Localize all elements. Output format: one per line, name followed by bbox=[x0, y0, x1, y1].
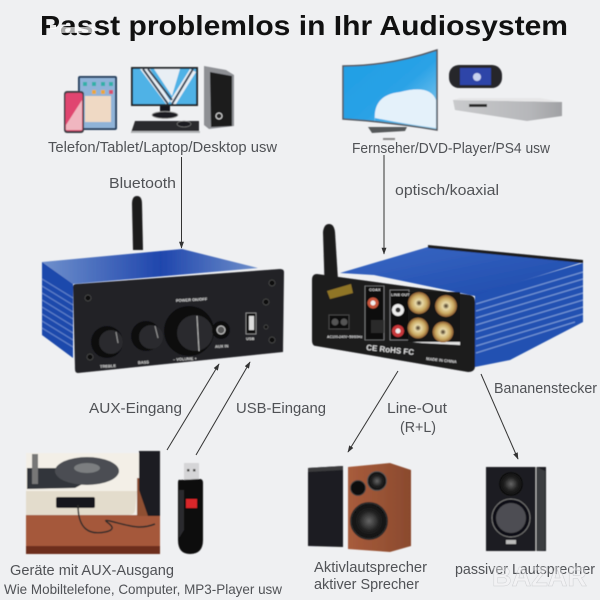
line out RCA bbox=[390, 290, 409, 340]
rear certifications: AC100-240V~50/60Hz bbox=[327, 335, 363, 339]
ribbed side bbox=[42, 262, 73, 358]
amplifier front view: AUX IN bbox=[215, 343, 229, 349]
front panel bbox=[73, 269, 284, 373]
handheld bbox=[449, 65, 502, 88]
amplifier rear view: CE RoHS FC bbox=[366, 343, 415, 357]
icon: active bookshelf speakers bbox=[308, 463, 411, 552]
curved TV bbox=[343, 50, 437, 130]
icon: phone, tablet, desktop computer bbox=[64, 66, 234, 133]
arrow: AUX cable bbox=[167, 364, 219, 450]
tablet bbox=[78, 76, 117, 130]
label: source devices left: Telefon/Tablet/Laptop/Desktop usw bbox=[48, 139, 277, 156]
amplifier front view bbox=[42, 196, 284, 373]
knobs bbox=[91, 326, 123, 358]
tonearm bbox=[32, 454, 38, 484]
amplifier front view: USB bbox=[246, 336, 255, 341]
title: Passt problemlos in Ihr Audiosystem bbox=[40, 10, 568, 41]
amplifier front view: POWER ON/OFF bbox=[176, 296, 208, 303]
power socket bbox=[329, 315, 349, 329]
ribbed side bbox=[475, 263, 583, 367]
amplifier rear view bbox=[312, 224, 583, 372]
label: source devices right: Fernseher/DVD-Player/PS4 usw bbox=[352, 140, 550, 157]
label: optisch/koaxial: optisch/koaxial bbox=[395, 182, 499, 199]
rear panel bbox=[312, 274, 475, 372]
banana terminals bbox=[408, 292, 460, 342]
black speaker bbox=[308, 466, 343, 547]
label: active speakers: Aktivlautsprecher bbox=[314, 559, 427, 576]
coax and optical bbox=[365, 286, 384, 340]
label: AUX device examples: Wie Mobiltelefone, Computer, MP3-Player usw bbox=[4, 581, 283, 597]
watermark: Bazar: BAZAR bbox=[492, 561, 587, 592]
usb port bbox=[246, 313, 256, 334]
monitor bbox=[131, 67, 198, 106]
label: active speakers: aktiver Sprecher bbox=[314, 576, 419, 593]
icon: TV, handheld console and DVD player bbox=[343, 50, 562, 140]
screws and led bbox=[85, 280, 275, 360]
arrow: banana plug to passive speaker bbox=[481, 374, 518, 459]
label: USB-Eingang: USB-Eingang bbox=[236, 400, 326, 417]
amplifier rear view: LINE OUT bbox=[391, 292, 410, 297]
label: Line-Out: Line-Out bbox=[387, 400, 448, 417]
label: AUX-Eingang: AUX-Eingang bbox=[89, 400, 182, 417]
top surface bbox=[42, 249, 258, 284]
tweeter bbox=[368, 472, 386, 490]
amplifier rear view: MADE IN CHINA bbox=[426, 356, 457, 364]
icon: passive speaker bbox=[486, 467, 546, 551]
antenna bbox=[132, 196, 143, 250]
label: Bluetooth: Bluetooth bbox=[109, 175, 176, 192]
wood speaker bbox=[348, 463, 411, 552]
label: AUX devices: Geräte mit AUX-Ausgang bbox=[10, 562, 174, 579]
keyboard bbox=[131, 121, 199, 133]
woofer bbox=[351, 503, 387, 539]
label: Bananenstecker: Bananenstecker bbox=[494, 380, 597, 397]
top surface bbox=[340, 247, 583, 296]
antenna gold connector bbox=[327, 284, 353, 299]
arrow: line-out to active speakers bbox=[348, 371, 398, 452]
platter bbox=[55, 457, 119, 485]
amplifier front view: BASS bbox=[138, 359, 149, 365]
label: active speakers bbox=[314, 559, 427, 593]
icon: USB stick bbox=[178, 463, 203, 554]
wooden shelf bbox=[26, 515, 160, 554]
panel labels: TREBLE bbox=[100, 363, 116, 369]
phone bbox=[64, 91, 84, 133]
watermark over title bbox=[50, 25, 94, 33]
display panel bbox=[56, 497, 95, 508]
woofer bbox=[492, 499, 530, 537]
aux jack bbox=[212, 321, 230, 339]
DVD player bbox=[453, 100, 562, 121]
speaker edge bbox=[139, 451, 160, 516]
port bbox=[350, 480, 366, 496]
tower bbox=[204, 66, 234, 129]
turntable base bbox=[26, 491, 137, 515]
amplifier rear view: COAX bbox=[369, 287, 381, 292]
tweeter bbox=[499, 472, 523, 496]
aux cable bbox=[78, 505, 155, 533]
photo: turntable with AUX output bbox=[26, 451, 160, 554]
arrow: optical to amplifier bbox=[383, 155, 385, 254]
arrow: Bluetooth to amplifier bbox=[180, 157, 182, 248]
label: R+L: (R+L) bbox=[400, 419, 436, 436]
amplifier front view: – VOLUME + bbox=[173, 356, 198, 362]
arrow: USB cable bbox=[196, 362, 250, 455]
label: passive speaker: passiver Lautsprecher bbox=[455, 561, 595, 578]
antenna bbox=[323, 224, 339, 298]
